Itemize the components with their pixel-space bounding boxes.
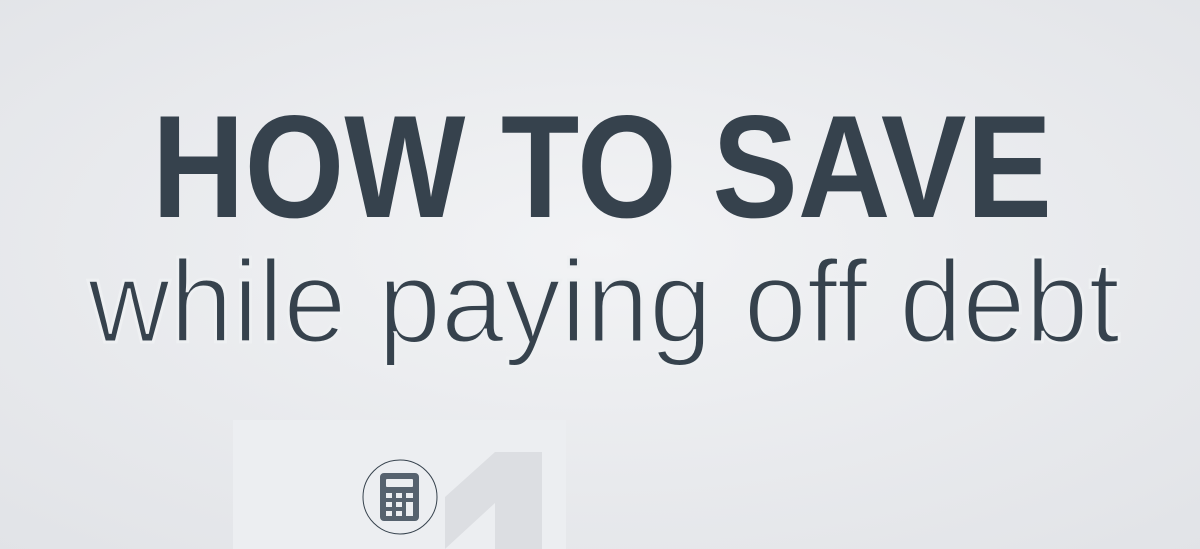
icon: calculator xyxy=(363,460,437,534)
title: HOW TO SAVE xyxy=(152,85,1052,248)
number 1 xyxy=(445,452,542,549)
panel: step 1 xyxy=(233,420,566,549)
subtitle: while paying off debt xyxy=(87,236,1120,367)
